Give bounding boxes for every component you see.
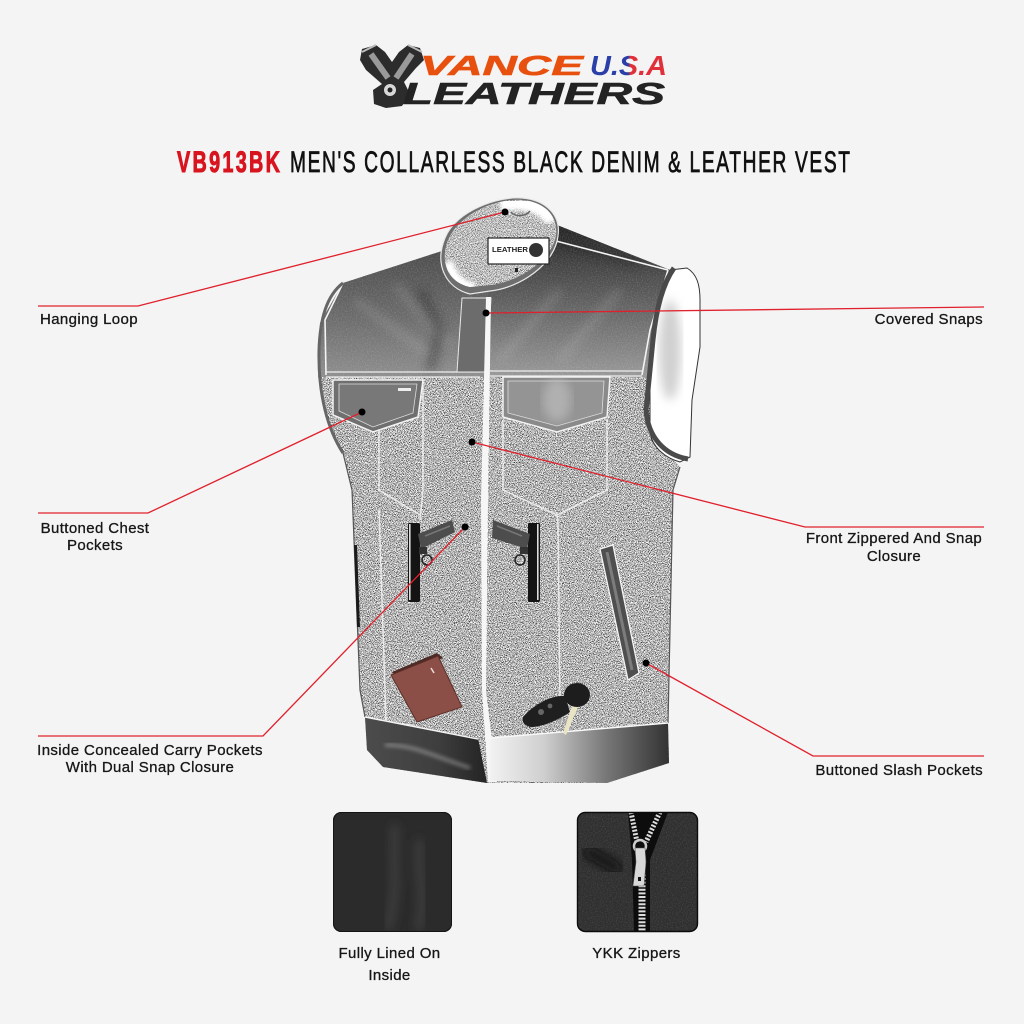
- callout: Buttoned Slash Pockets: [642, 660, 984, 779]
- bottom band right: [490, 723, 669, 783]
- yoke seam: [326, 371, 642, 377]
- armhole binding: [646, 268, 688, 459]
- callout: Front Zippered And Snap Closure: Closure: [867, 548, 921, 565]
- callout: Hanging Loop: Hanging Loop: [40, 311, 138, 328]
- leather yoke: [315, 222, 675, 377]
- left side slit: [354, 545, 360, 627]
- title: product name: MEN'S COLLARLESS BLACK DENIM & LEATHER VEST: [290, 146, 850, 179]
- callout: Buttoned Slash Pockets: Buttoned Slash Pockets: [815, 762, 983, 779]
- callout: Inside Concealed Carry Pockets: Inside Concealed Carry Pockets: [37, 742, 263, 759]
- bottom band left: [365, 717, 487, 783]
- collar label: LEATHER: [492, 247, 528, 254]
- vest illustration: [300, 196, 700, 800]
- callout: Covered Snaps: Covered Snaps: [875, 311, 983, 328]
- armhole right: [650, 268, 700, 462]
- collar: [440, 196, 560, 294]
- callout: Front Zippered And Snap Closure: Front Zippered And Snap: [806, 530, 982, 547]
- callout: Front Zippered And Snap Closure: [468, 438, 984, 565]
- callout: Inside Concealed Carry Pockets: [37, 524, 468, 776]
- swatch: lining: [333, 812, 452, 932]
- logo word: USA: U.S.A: [590, 50, 667, 81]
- centre zipper strip: [481, 297, 497, 782]
- caption: Fully Lined On Inside: Inside: [368, 967, 411, 984]
- hanging loop: [511, 211, 530, 216]
- logo word: Vance: VANCE: [420, 50, 585, 81]
- callout: Covered Snaps: [482, 307, 984, 328]
- title: product code: VB913BK: [177, 146, 280, 179]
- swatch: zipper: [577, 812, 698, 932]
- snap placket: [457, 298, 491, 372]
- armhole shading: [659, 300, 681, 400]
- callout: Buttoned Chest Pockets: Pockets: [67, 537, 123, 554]
- caption: Fully Lined On Inside: [338, 945, 441, 984]
- icon: engine: [360, 45, 424, 108]
- caption: YKK Zippers: YKK Zippers: [592, 945, 681, 962]
- right chest pocket flap: [503, 377, 610, 432]
- left chest pocket flap: [333, 380, 423, 432]
- collar band: [441, 198, 558, 294]
- denim seam stitching: [379, 380, 607, 720]
- callout: Buttoned Chest Pockets: Buttoned Chest: [41, 520, 150, 537]
- icon: car key: [523, 683, 590, 735]
- callout: Inside Concealed Carry Pockets: With Dual Snap Closure: [66, 759, 234, 776]
- logo word: Leathers: LEATHERS: [403, 76, 666, 111]
- title: [177, 146, 850, 179]
- logo: Vance USA Leathers: [360, 45, 667, 111]
- callout: Buttoned Chest Pockets: [38, 408, 366, 554]
- callout: Hanging Loop: [38, 208, 508, 328]
- vest body denim: [318, 226, 680, 783]
- icon: right pistol: [492, 520, 540, 602]
- right slash pocket: [600, 545, 639, 680]
- left armhole edge: [319, 283, 343, 453]
- vest outline: [343, 453, 680, 723]
- shoulder stitching: [325, 240, 668, 375]
- icon: left pistol: [408, 520, 455, 602]
- caption: Fully Lined On Inside: Fully Lined On: [338, 945, 441, 962]
- icon: wallet: [391, 653, 462, 722]
